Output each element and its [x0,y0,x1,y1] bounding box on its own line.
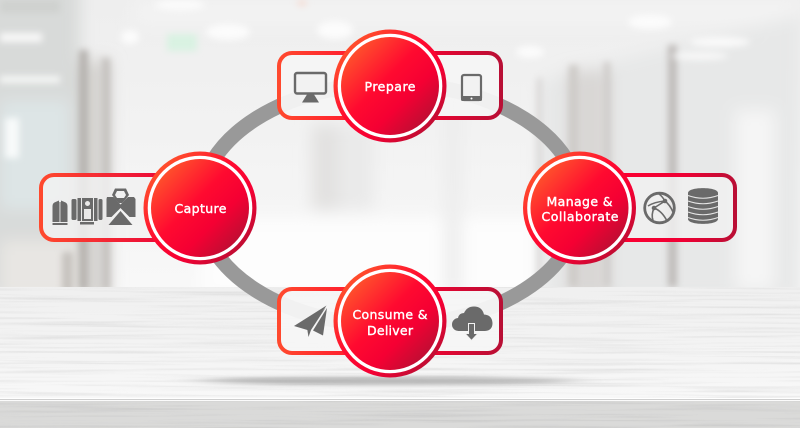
icon: tablet [461,75,482,101]
grey cycle ring [200,84,580,326]
node: Manage & Collaborate [523,152,735,264]
badge: Manage & Collaborate: Collaborate [542,209,619,224]
badge: Prepare: Prepare [364,79,416,94]
node: Capture [41,152,256,264]
icon: cloud download [452,306,492,340]
node: Prepare [279,30,501,142]
badge: Capture: Capture [174,201,227,216]
panel: Prepare icons [279,53,501,118]
badge: Manage & Collaborate [523,152,636,264]
panel: Manage icons [590,175,735,240]
table shadow under the diagram [205,377,575,385]
icon: globe network [645,193,674,223]
background: white table top [0,287,800,428]
badge: Manage & Collaborate: Manage & [546,194,613,209]
badge: Consume & Deliver: Consume & [352,307,428,322]
icon: paper plane [294,306,327,337]
icon: surveying instruments [52,188,136,225]
badge: Capture [144,152,256,264]
badge: Consume & Deliver [334,264,446,378]
panel: Consume icons [279,289,501,353]
panel: Capture icons [41,175,191,240]
background: blurred office [0,0,736,287]
node: Consume & Deliver [279,264,501,378]
badge: Prepare [334,30,446,142]
badge: Consume & Deliver: Deliver [367,323,414,338]
icon: database [688,188,718,224]
icon: desktop monitor [295,73,326,102]
